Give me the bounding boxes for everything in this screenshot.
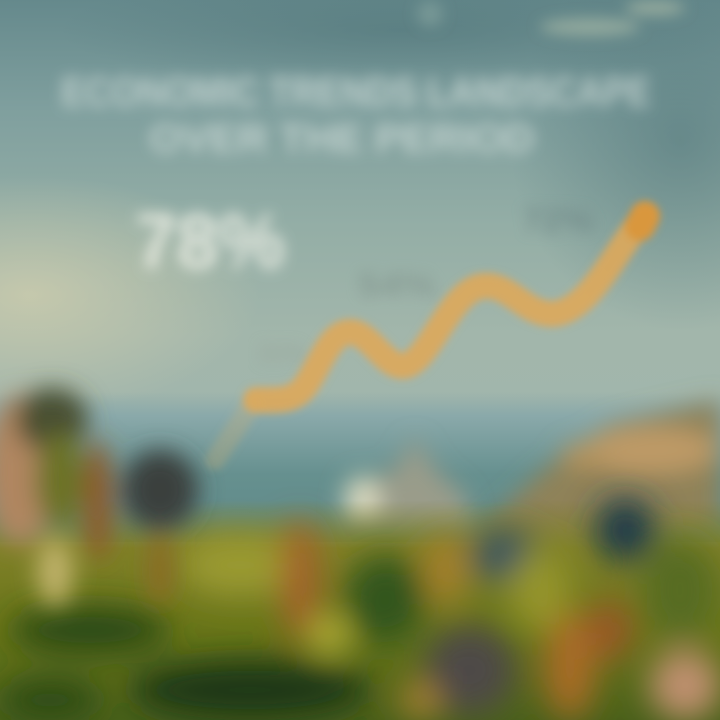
foreground ground	[0, 500, 720, 720]
data label: 72%: 72%	[522, 202, 594, 240]
main percentage: 78%	[135, 197, 285, 285]
left trees	[0, 388, 198, 606]
right cliff	[480, 400, 720, 570]
foreground vegetation	[0, 498, 720, 720]
sea	[0, 392, 720, 542]
blurred cloud streak	[417, 1, 685, 36]
background sky	[0, 0, 720, 540]
title text: OVER THE PERIOD	[150, 117, 534, 161]
line chart: growth trend	[215, 216, 645, 460]
data label: 31%: 31%	[258, 338, 306, 368]
distant building	[340, 438, 475, 535]
data label: 54%: 54%	[358, 267, 436, 303]
title text	[61, 68, 651, 161]
